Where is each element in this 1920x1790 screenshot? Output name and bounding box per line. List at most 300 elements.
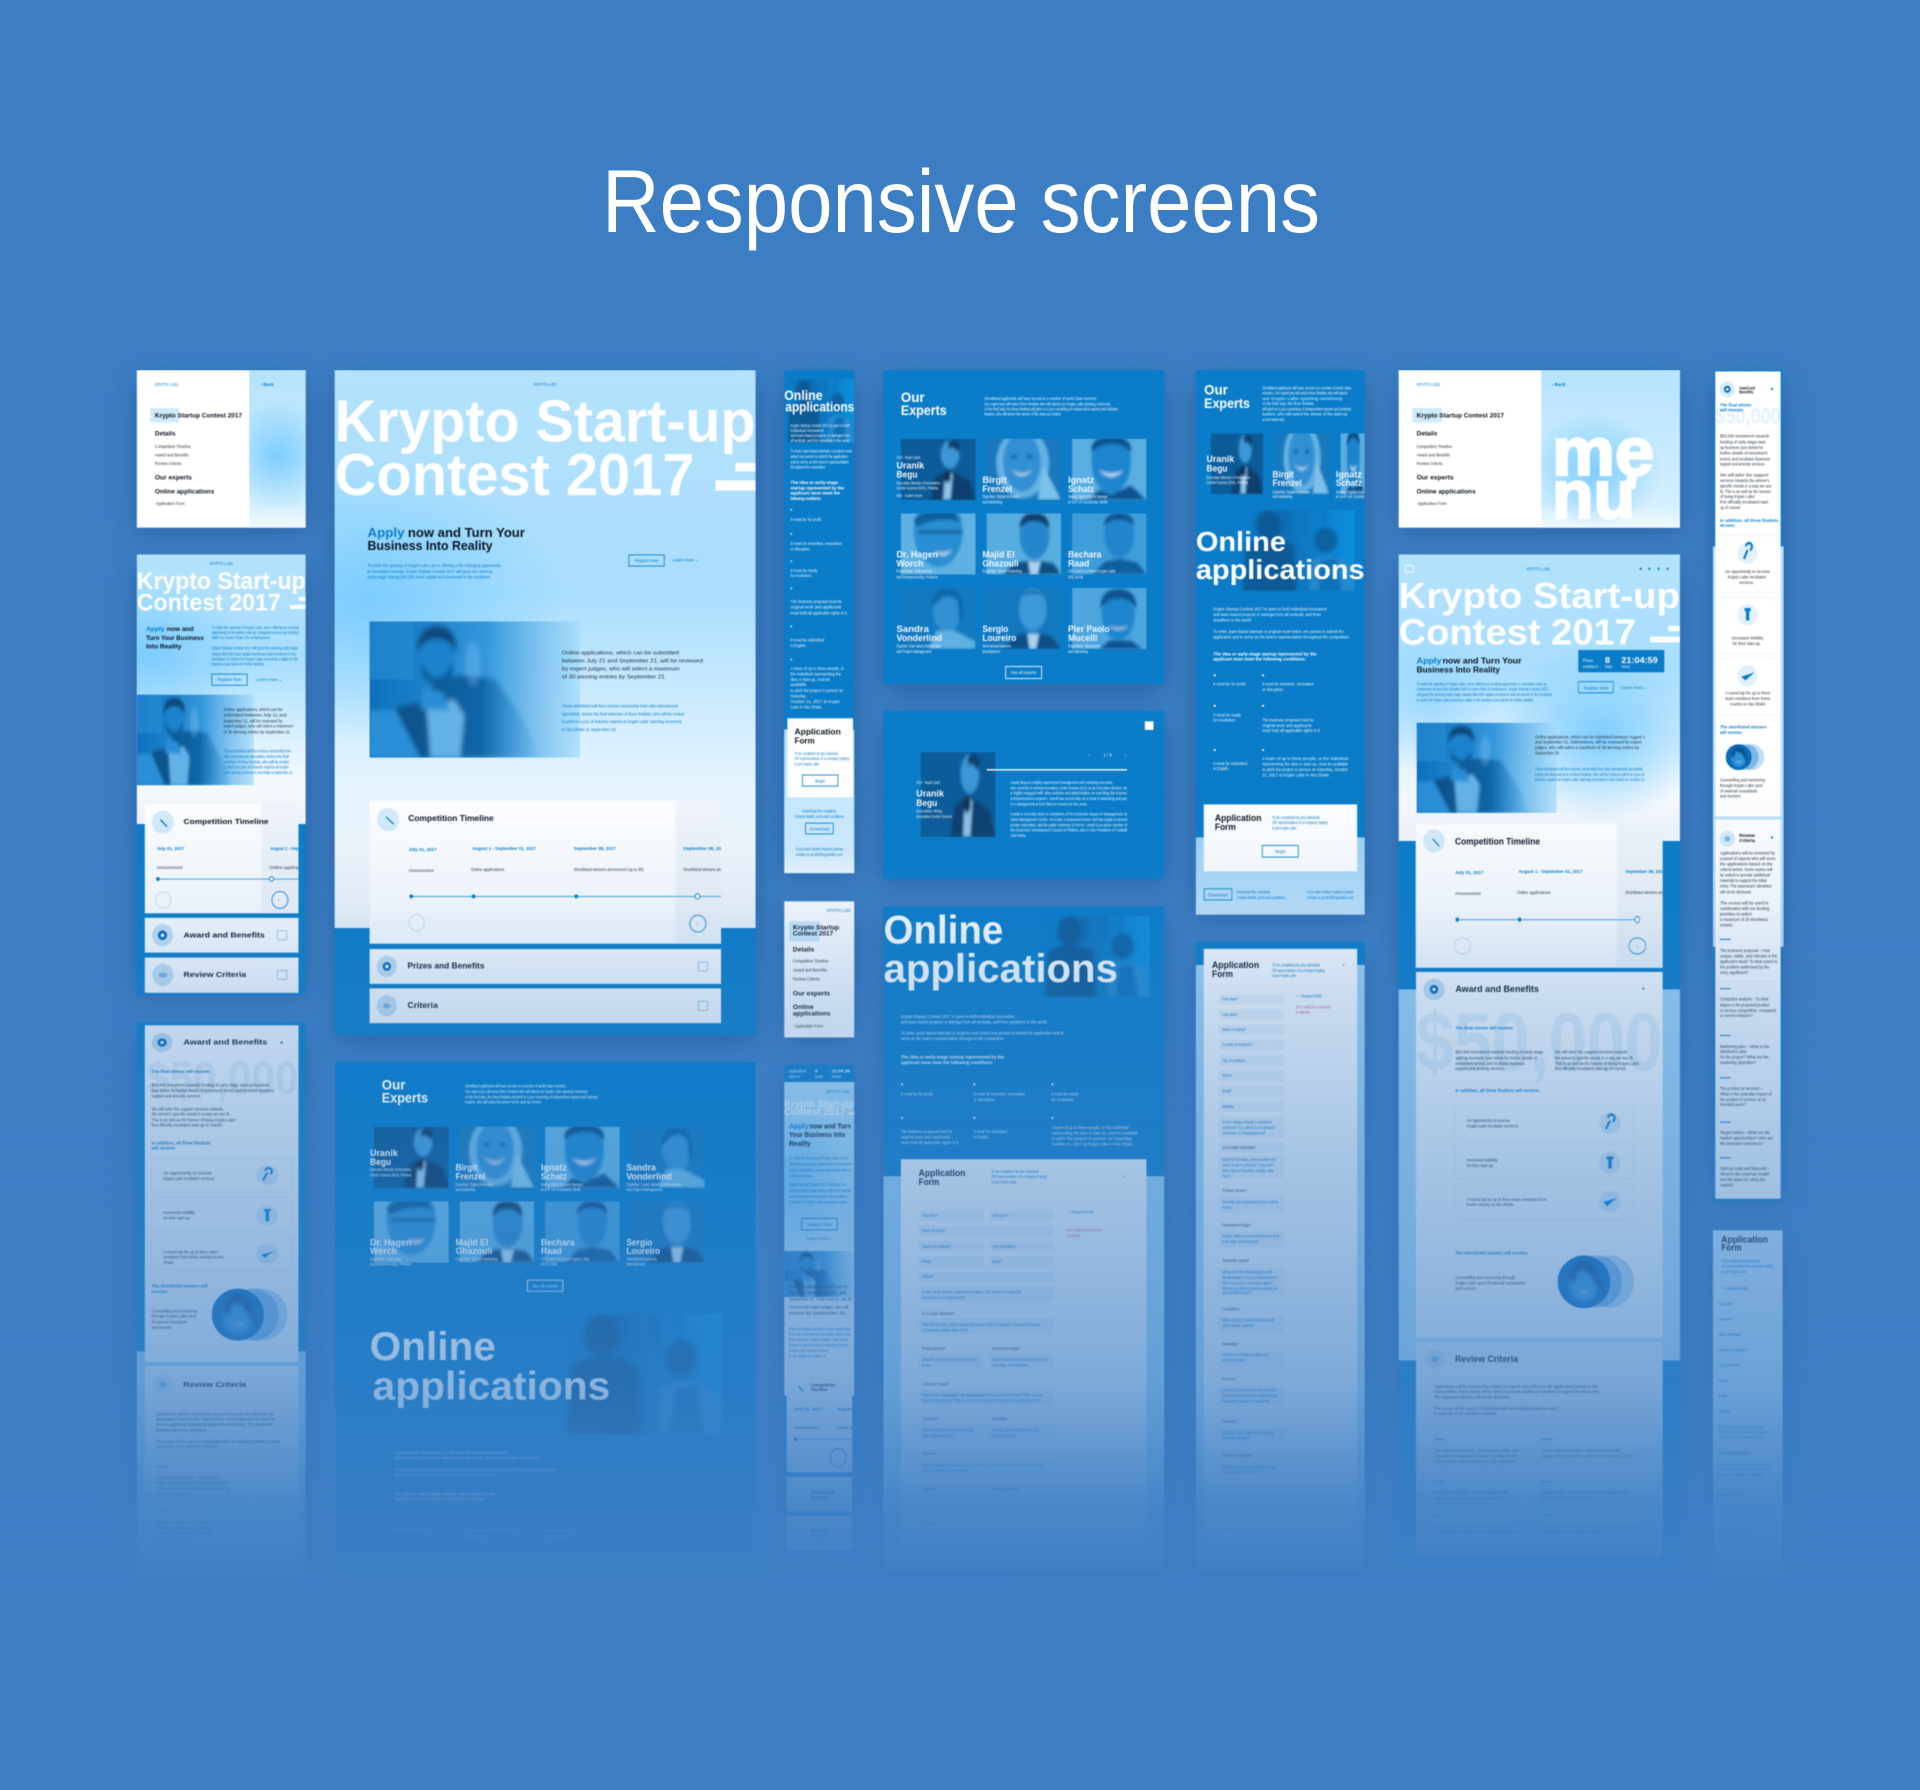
- phone menu: Contest 2017: [793, 931, 834, 938]
- card: review criteria: identities will not be disclosed.: [156, 1428, 206, 1434]
- experts row: Birgit: [1273, 469, 1294, 480]
- body copy: The idea or early-stage startup represented by the: [1213, 651, 1317, 656]
- panel: desktop menu: Review Criteria: [1417, 461, 1443, 466]
- timeline card: August 1 - September 01, 2017: [472, 846, 536, 852]
- column 3: phone online applications screen: [784, 370, 854, 1037]
- card: review criteria: The business proposal – How unique, viable, and: [1434, 1448, 1519, 1453]
- column 1: award and review screen: [137, 1023, 306, 1585]
- download row: contact us at info@kryptolabs.com: [1307, 895, 1354, 900]
- form fields: [919, 1211, 1054, 1509]
- panel: our experts: development: [626, 1262, 646, 1268]
- card: award and benefits: members from home country to Abu: [163, 1255, 224, 1261]
- card: award and benefits: Counselling and mentoring: [152, 1309, 197, 1314]
- card: review criteria: applicant's ideal? To what extent is: [1720, 958, 1777, 964]
- card: award and benefits: up of course!: [1720, 504, 1741, 510]
- application form phone: Email*: [1719, 1393, 1727, 1398]
- panel: tablet hero: elite international specialists, before the final: [224, 754, 289, 760]
- card: review criteria: Marketing plan – What is the distribution plan: [1434, 1523, 1513, 1529]
- application form card: Development Stage*: [992, 1346, 1020, 1351]
- body copy: representing the idea or start-up, must be available: [1262, 761, 1349, 767]
- form card: Co-Founder information*: [1222, 1145, 1256, 1150]
- timeline card: Online applica: [269, 865, 299, 871]
- phone menu: Our experts: [793, 991, 831, 998]
- download row: If you have further inquiries please: [1307, 889, 1354, 895]
- panel: our experts: Startup Digital Solutions Manager: [541, 1182, 583, 1188]
- panel: our experts: Startup Digital Solutions Manager: [1068, 494, 1108, 499]
- panel: our experts: Expertise: Digital Innovation: [455, 1182, 494, 1188]
- application form phone: Describe your proposed product and its: [1719, 1503, 1774, 1509]
- desktop copy: Online applications, which can be submitted between August 1: [1535, 734, 1646, 740]
- countdown bar: close in: [789, 1074, 800, 1079]
- heading: applications: [883, 947, 1118, 991]
- hero: in return for Krypto Labs receiving a stake.: [789, 1199, 848, 1204]
- desktop copy: and September 21. Submissions, will be reviewed by expert: [1535, 739, 1642, 745]
- hero: at Krypto Labs' opening ceremony: [789, 1348, 829, 1353]
- hero: [784, 1082, 855, 1438]
- hero subtitle: now and Turn Your: [408, 526, 525, 540]
- timeline card: ›: [696, 922, 698, 927]
- panel: tablet hero: selection of three finalists, who will be invited: [224, 759, 289, 765]
- card: award and benefits: An opportunity to receive: [1725, 569, 1771, 574]
- body copy: throughout the competition.: [791, 465, 826, 470]
- body copy: It must be submitted: [1213, 761, 1248, 766]
- body copy: Krypto Startup Contest 2017 is open to both individual innovators: [1213, 606, 1327, 612]
- application form card: to join Krypto Labs.: [991, 1179, 1017, 1185]
- download section: [795, 808, 844, 857]
- phone accordion cards: Award and: [811, 1490, 835, 1495]
- hero: Online applications, which can be: [789, 1284, 849, 1289]
- body copy: or disruptive.: [791, 546, 810, 551]
- card: award and benefits: Benefits: [1739, 389, 1754, 395]
- panel: tablet hero: to pitch to a jury of industry experts at Krypto: [224, 765, 289, 771]
- body copy: October 21, 2017 at Krypto Labs in Abu Dhabi.: [1052, 1141, 1133, 1146]
- form card: What are the advantages and: [1222, 1269, 1272, 1275]
- hero heading: [335, 382, 756, 508]
- form card: Application: [1212, 960, 1259, 970]
- phone accordion cards: Review: [811, 1528, 827, 1533]
- hero: Reality: [789, 1141, 811, 1148]
- heading: [784, 388, 854, 415]
- form card: * = Required field: [1296, 993, 1322, 999]
- card: review criteria: be asked to provide additional: [1720, 872, 1770, 878]
- body copy: [791, 423, 852, 710]
- experts heading: contest.: [1262, 417, 1286, 422]
- download section: contact us at info@kryptolabs.com: [796, 852, 843, 857]
- form card: Development Stage*: [1222, 1222, 1251, 1228]
- application form card: First name*: [922, 1213, 938, 1218]
- download section: Download the complete: [802, 808, 837, 814]
- countdown bar: [784, 1065, 854, 1082]
- panel: our experts: Sandra: [897, 624, 929, 634]
- panel: our experts: Dr. Hagen: [897, 549, 938, 560]
- card: review criteria: provide additional materials to support the initial entry. The assessors': [156, 1422, 273, 1428]
- card: award and benefits: terms) and incubator business: [1720, 456, 1770, 461]
- panel background: [137, 1023, 306, 1585]
- body copy: original work and applicants: [1262, 723, 1312, 728]
- card: award and benefits: We will tailor the support services towards: [1555, 1049, 1628, 1055]
- card: award and benefits: (see below for further details of investment terms) and incubator business: [152, 1088, 275, 1094]
- review criteria continuation: Target market – What are the: [1720, 1130, 1770, 1135]
- card: award and benefits: $50,000: [146, 1053, 298, 1105]
- form card: ×: [1343, 962, 1345, 967]
- form card: forecast budget?: [1222, 1435, 1251, 1440]
- hero: To mark the opening of Krypto Labs, we're: [789, 1155, 849, 1161]
- body copy: To enter, team-based startups or projects must select one person to submit the application and to: [901, 1030, 1064, 1035]
- panel: our experts: and Project Management: [897, 649, 932, 654]
- body copy: Labs in Abu Dhabi.: [791, 704, 822, 710]
- card: review criteria: viable, and relevant is the applicant's ideal?: [156, 1481, 230, 1486]
- column 7: phone lower screens: [1713, 981, 1783, 1581]
- hero: from elite international specialists, before the: [789, 1331, 851, 1337]
- experts heading: will pitch to a jury consisting of independent experts and industry: [1262, 406, 1352, 411]
- online applications heading: Online: [1196, 525, 1286, 557]
- column 7: phone award screen: [1713, 370, 1784, 1056]
- card: review criteria: a maximum of 30 shortlisted: [1720, 916, 1768, 922]
- card: award and benefits: and mentors.: [1455, 1286, 1477, 1291]
- application form phone: have any co-founders, simply state: [1719, 1472, 1764, 1477]
- experts row: Frenzel: [1273, 478, 1302, 488]
- card: award and benefits: $50,000 investment towards funding of early-stage: [1455, 1049, 1544, 1055]
- body copy: for incubation.: [1052, 1097, 1074, 1102]
- panel: tablet hero: business (see below for further details).: [212, 661, 264, 668]
- body copy: Krypto Startup Contest 2017 is open to both: [791, 423, 850, 428]
- application form card: Describe your proposed product and its: [922, 1357, 977, 1362]
- card: review criteria: To what extent is the problem addressed by: [156, 1486, 230, 1492]
- form card: disadvantages of your product/service?: [1222, 1275, 1278, 1280]
- card: award and benefits: first officially incubated start-up of course!: [1555, 1066, 1626, 1071]
- card: award and benefits: support and amenity services.: [152, 1094, 201, 1100]
- timeline card: Online applications: [471, 867, 505, 873]
- panel: tablet menu: Review Criteria: [155, 461, 181, 467]
- card: prizes and benefits: [370, 949, 721, 984]
- application form card: Marketing*: [992, 1416, 1007, 1421]
- desktop buttons: Register Now: [1584, 685, 1609, 690]
- desktop subtitle: will grant the winning early-stage startup $50,000 capital investment and enrolment in the incubator,: [1417, 691, 1553, 697]
- application form phone: OR representative of a company hoping: [1721, 1263, 1774, 1269]
- hero subtitle: Apply: [367, 526, 405, 540]
- application form phone: Product Service*: [1719, 1492, 1741, 1498]
- application form phone: Application: [1721, 1233, 1768, 1244]
- panel background: [334, 370, 756, 1036]
- countdown box: Days: [1605, 663, 1612, 669]
- panel: expert detail modal: who currently is running Innovation Center Kosovo (ICK) as an Executive Director. He: [1010, 785, 1128, 790]
- panel: our experts: Center Kosovo (ICK), Pristina: [897, 485, 939, 491]
- card: award and benefits: $50,000 investment towards: [1720, 433, 1769, 439]
- experts heading: Shortlisted applicants will have access to a number of world class: [1262, 385, 1351, 391]
- card: award and benefits: the winner's specific needs in a way we see fit.: [1555, 1055, 1634, 1061]
- panel: tablet hero: opportunity to innovative start-up companies across any industry: [212, 630, 299, 636]
- panel: our experts: Schatz: [541, 1172, 567, 1181]
- hero copy: in Abu Dhabi on September 24.: [562, 727, 617, 733]
- card: award and benefits: will receive:: [1719, 729, 1743, 735]
- desktop buttons: Learn more ⌄: [1621, 684, 1648, 690]
- body copy: must hold all applicable rights in it.: [901, 1140, 959, 1145]
- card: review criteria: entry. The assessors' identities: [1720, 883, 1772, 889]
- card: award and benefits: The shortlisted winners will receive:: [1455, 1250, 1529, 1256]
- panel: our experts: Raad: [1068, 558, 1089, 569]
- phone menu: Details: [793, 947, 815, 953]
- card: review criteria: The business proposal – How: [1720, 948, 1771, 953]
- panel: our experts: Ignatz: [541, 1163, 567, 1173]
- body copy: A team of up to three people, in: [791, 666, 845, 671]
- form card: Competition*: [1222, 1306, 1240, 1311]
- card: award and benefits: The final winner will receive:: [152, 1069, 211, 1075]
- phone timeline card: Online a: [836, 1425, 853, 1430]
- body copy: original work and applicants: [791, 604, 841, 610]
- hero: Your Business Into: [789, 1132, 845, 1139]
- form card: to join Krypto Labs.: [1272, 973, 1297, 978]
- card: award and benefits: In addition, all three finalists: [152, 1141, 211, 1146]
- form card: Upload pitch: [1222, 1525, 1239, 1531]
- application form phone: email of each co-founder. If you don't: [1719, 1467, 1769, 1472]
- form card: and where is it headquartered?: [1222, 1130, 1266, 1135]
- experts heading: Our: [1204, 382, 1228, 398]
- panel: our experts: Majid El: [982, 549, 1015, 560]
- panel: our experts: Raad: [541, 1247, 562, 1256]
- desktop copy: before the final selection of three finalists, who will be invited to pitch to a jury of: [1535, 771, 1645, 777]
- form card: City of residence: [1222, 1058, 1246, 1063]
- body copy: original work and applicants: [901, 1134, 950, 1140]
- hero copy: by expert judges, who will select a maximum: [562, 666, 680, 673]
- application form card: Reason for application*: [992, 1486, 1020, 1491]
- card: award and benefits: start-up business (see below for further details of: [1455, 1055, 1538, 1061]
- card: review criteria: combination with our funding: [1720, 906, 1770, 911]
- hero: entries by September 20.: [789, 1310, 846, 1315]
- form card: Country of residence*: [1222, 1042, 1253, 1047]
- card: award and benefits: for their start-up.: [1733, 641, 1761, 646]
- hero buttons: Register Now: [635, 558, 659, 564]
- card: award and benefits: The shortlisted winners will: [152, 1284, 208, 1289]
- panel: tablet hero: Labs' opening ceremony in Abu Dhabi on September 24.: [224, 770, 293, 776]
- card: award and benefits: will receive:: [1719, 407, 1745, 413]
- panel: our experts: Info Learn more: [897, 493, 923, 498]
- review criteria continuation: What is the potential impact of: [1720, 1091, 1772, 1097]
- card: award and benefits: Krypto Labs incubator services.: [1467, 1123, 1519, 1129]
- review criteria continuation: capital?: [1720, 1182, 1734, 1187]
- hero heading: Contest 2017: [335, 442, 695, 508]
- title: Responsive screens: [602, 151, 1320, 251]
- card: award and benefits: An opportunity to receive: [163, 1171, 212, 1176]
- phone timeline card: Announcement: [794, 1425, 821, 1430]
- panel: our experts: and Marketing: [455, 1187, 475, 1193]
- card: review criteria: Review Criteria: [1455, 1354, 1518, 1364]
- card: award and benefits: services towards the winner's: [1720, 478, 1769, 483]
- body copy: A team of up to three people, or the individual: [1262, 756, 1348, 761]
- desktop copy: industry experts at Krypto Labs' opening ceremony in Abu Dhabi on October 21.: [1535, 777, 1646, 782]
- card: review criteria: or service competitive, compared: [156, 1531, 213, 1537]
- panel: our experts: leaders, who will select the winner of the start-up contest.: [465, 1100, 542, 1105]
- application form card: Begin: [815, 778, 826, 784]
- form card: your product/service?: [1222, 1290, 1252, 1295]
- hero copy: [562, 650, 703, 733]
- form card: in its stage of development.: [1222, 1239, 1259, 1244]
- menu word: nu: [1552, 457, 1635, 533]
- application form card: Email*: [992, 1259, 1002, 1264]
- panel: expert detail modal: the Economic Development Council of Pristina, also a Vice President of Football: [1010, 827, 1127, 833]
- desktop timeline card: Competition Timeline: [1455, 837, 1541, 847]
- body copy: and team-based projects or startups from all verticals, and from anywhere in the world.: [901, 1019, 1048, 1025]
- body copy: It must be for profit.: [791, 517, 822, 522]
- experts row: Executive Director of Innovation: [1207, 475, 1250, 480]
- timeline card: [145, 804, 299, 913]
- body copy: and team-based projects or startups from all verticals, and from: [1213, 612, 1321, 617]
- panel: our experts: Loureiro: [982, 633, 1017, 643]
- card: review criteria: Review Criteria: [183, 1380, 247, 1389]
- application form phone: to join Krypto Labs.: [1721, 1269, 1747, 1274]
- download section: Contest details, terms and conditions.: [795, 814, 844, 819]
- experts row: Ignatz: [1336, 469, 1363, 480]
- card: award and benefits: receive:: [152, 1289, 169, 1295]
- application form card: What are the advantages and disadvantages of your product/service? Who are you: [922, 1392, 1043, 1398]
- column 4: online applications screen: [883, 907, 1164, 1571]
- application form card: Application: [919, 1168, 965, 1178]
- panel: tablet menu: Details: [155, 432, 176, 438]
- application form card: Is your startup already a registered company? If so, where is it registered: [922, 1289, 1021, 1295]
- online applications section: It must be ready: [544, 1528, 571, 1534]
- card: award and benefits: up business (see below for: [1720, 445, 1764, 450]
- application form phone: [1713, 1230, 1783, 1581]
- body copy: The business proposal must be: [1262, 717, 1314, 722]
- panel: our experts: Sergio: [626, 1238, 653, 1247]
- panel: our experts: At the final stay, the three finalists will pitch to a jury consisting of independent experts and industry: [465, 1095, 598, 1100]
- panel: expert detail modal: Swiss Management Center. He is also a seasoned lecturer and has taught at several: [1010, 817, 1127, 822]
- timeline card: Announcement: [157, 865, 183, 871]
- application form card: [787, 718, 853, 797]
- hero subtitle: to innovative startups. Krypto Startup Contest 2017 will grant the winning: [367, 569, 492, 575]
- application form card: To be completed by any individual: [1272, 815, 1320, 820]
- panel: our experts: Executive Director of Innovation: [897, 480, 941, 485]
- panel: our experts: Frenzel: [982, 483, 1012, 494]
- form card: forecasted results of achieving: [1222, 1398, 1270, 1404]
- panel: our experts: Loureiro: [626, 1247, 660, 1256]
- desktop timeline card: Shortlisted winners an: [1625, 890, 1663, 895]
- card: award and benefits: and mentors.: [1720, 793, 1741, 799]
- application form card: [901, 1159, 1146, 1563]
- panel: expert detail modal: private universities, and the public university of Prizren. Uranik is an active member of: [1010, 822, 1128, 827]
- application form phone: Co-Founder information*: [1719, 1450, 1751, 1456]
- form card: What are your financial needs and: [1222, 1430, 1274, 1435]
- panel: our experts: Vonderlind: [897, 633, 942, 643]
- panel: tablet hero: Contest 2017: [137, 589, 281, 616]
- card: award and benefits: first officially incubated start-up of course!: [152, 1123, 222, 1129]
- countdown box: Phase: [1583, 658, 1594, 663]
- card: award and benefits: Krypto Labs' pool of external consultants: [1455, 1280, 1526, 1286]
- card: award and benefits: An opportunity to receive: [1467, 1118, 1510, 1123]
- panel: our experts: Our: [382, 1078, 406, 1093]
- body copy: following conditions:: [791, 496, 821, 501]
- countdown bar: Days: [815, 1074, 823, 1079]
- body copy: and to serve as the team's representative: [791, 459, 850, 464]
- card: review criteria: the problem addressed by the: [1720, 964, 1770, 970]
- online applications section: and team-based projects or startups from all verticals, and from anywhere in the world.: [394, 1455, 540, 1461]
- panel: our experts: Mucelli: [1068, 633, 1097, 643]
- panel: tablet hero: Krypto Start-up: [137, 567, 306, 594]
- hero subtitle: early-stage startup $50,000 seed capital and enrolment in the incubator.: [367, 574, 491, 581]
- card: review criteria: Competitor analysis – To what: [156, 1520, 209, 1525]
- application form card: to join Krypto Labs.: [795, 761, 820, 767]
- body copy: A team of up to three people, or the individual: [1052, 1125, 1129, 1130]
- panel: our experts: leaders, who will select the winner of the start-up contest.: [984, 411, 1061, 417]
- card: review criteria: for the project? What are the marketing objectives?: [1434, 1529, 1521, 1534]
- timeline card: Shortlisted winners an: [683, 867, 721, 873]
- online applications section: or disruptive.: [465, 1534, 486, 1539]
- application form card: Country of residence*: [922, 1244, 952, 1249]
- panel: desktop hero: [1398, 554, 1681, 990]
- panel: tablet menu: Competition Timeline: [155, 444, 191, 450]
- card: review criteria: to current solutions?: [156, 1536, 190, 1542]
- hero: reviewed by expert judges, who will: [789, 1304, 848, 1310]
- desktop photo: [1417, 723, 1557, 813]
- form card: is required: [1296, 1009, 1310, 1015]
- panel: our experts: Ignatz: [1068, 475, 1095, 485]
- form card: Phone*: [1222, 1073, 1232, 1078]
- card: review criteria: a panel of experts who will score: [1720, 856, 1776, 861]
- application form phone: and where is it headquartered?: [1719, 1434, 1762, 1440]
- hero copy: of 30 winning entries by September 21.: [562, 674, 667, 681]
- review criteria continuation: intended users?: [1720, 1101, 1746, 1107]
- card: award and benefits: [1416, 972, 1663, 1338]
- hero heading: Krypto Start-up: [335, 388, 756, 455]
- panel: our experts: At the final stay, the three finalists will pitch to a jury consisting of independent experts and industry: [984, 406, 1119, 411]
- phone menu: Krypto Startup: [793, 925, 840, 932]
- panel: our experts: CEO - Head Coach: [897, 455, 921, 460]
- card: award and benefits: will receive:: [151, 1146, 176, 1152]
- form card: First name*: [1222, 996, 1238, 1001]
- hero copy: specialists, before the final selection of three finalists, who will be invited: [562, 711, 684, 718]
- hero: more than 15 employees.: [789, 1173, 813, 1179]
- heading: Online: [883, 908, 1003, 952]
- card: award and benefits: services.: [1739, 579, 1754, 585]
- application form phone: * = Required field: [1721, 1286, 1749, 1291]
- form card: Consumer Appeal*: [1222, 1258, 1249, 1263]
- column 5: experts and applications screen: [1196, 370, 1365, 915]
- review criteria continuation: and the plans for using the: [1720, 1177, 1765, 1182]
- form card: Financial*: [1222, 1418, 1236, 1424]
- card: review criteria: [145, 958, 298, 993]
- timeline card: July 01, 2017: [157, 846, 185, 852]
- countdown bar: 8: [815, 1068, 818, 1073]
- hero copy: to pitch to a jury of industry experts at Krypto Labs' opening ceremony: [562, 719, 682, 725]
- body copy: serve as the team's representative throughout the competition.: [901, 1036, 1004, 1041]
- panel: tablet menu: Online applications: [155, 489, 215, 495]
- body copy: and team-based projects or startups from: [791, 433, 850, 438]
- panel: expert detail modal: ‹: [1089, 752, 1091, 758]
- card: review criteria: a maximum of 30 shortlisted entrants.: [1434, 1411, 1497, 1416]
- countdown bar: Applications: [789, 1068, 806, 1073]
- hero: invited to pitch to a jury of industry experts: [789, 1342, 848, 1348]
- form card: Revenue*: [1222, 1376, 1236, 1382]
- card: award and benefits: This is as well as the honour of being Krypto Labs': [1555, 1060, 1639, 1066]
- countdown box: 21:04:59: [1621, 656, 1658, 665]
- phone timeline card: Competition: [811, 1382, 836, 1388]
- column 5: application form screen: [1196, 942, 1365, 1571]
- panel: our experts: at SAP UX Accelerator, Berlin: [541, 1187, 581, 1193]
- experts heading: mentors. Our expert jury will select three finalists who will attend: [1262, 390, 1348, 396]
- card: award and benefits: We will tailor the support: [1720, 472, 1769, 477]
- application form phone: Phone*: [1719, 1378, 1729, 1383]
- panel: expert detail modal: entrepreneurial ecosystem. Uranik has served also as a Head of Marketing and part: [1010, 796, 1128, 801]
- form card: Last name*: [1222, 1012, 1238, 1017]
- panel background: [784, 370, 854, 873]
- review criteria continuation: market opportunities? Who are: [1720, 1135, 1774, 1141]
- application form card: Financial*: [922, 1486, 936, 1491]
- hero photo: [370, 621, 580, 758]
- phone menu: Online: [793, 1005, 814, 1011]
- hero buttons: [629, 555, 699, 566]
- card: review criteria: a maximum of 30 shortlisted entrants.: [156, 1444, 218, 1450]
- body copy: application and to serve as the team's representative throughout the competition.: [1213, 634, 1350, 639]
- card: review criteria: is the problem addressed by the entry significant?: [1434, 1458, 1518, 1464]
